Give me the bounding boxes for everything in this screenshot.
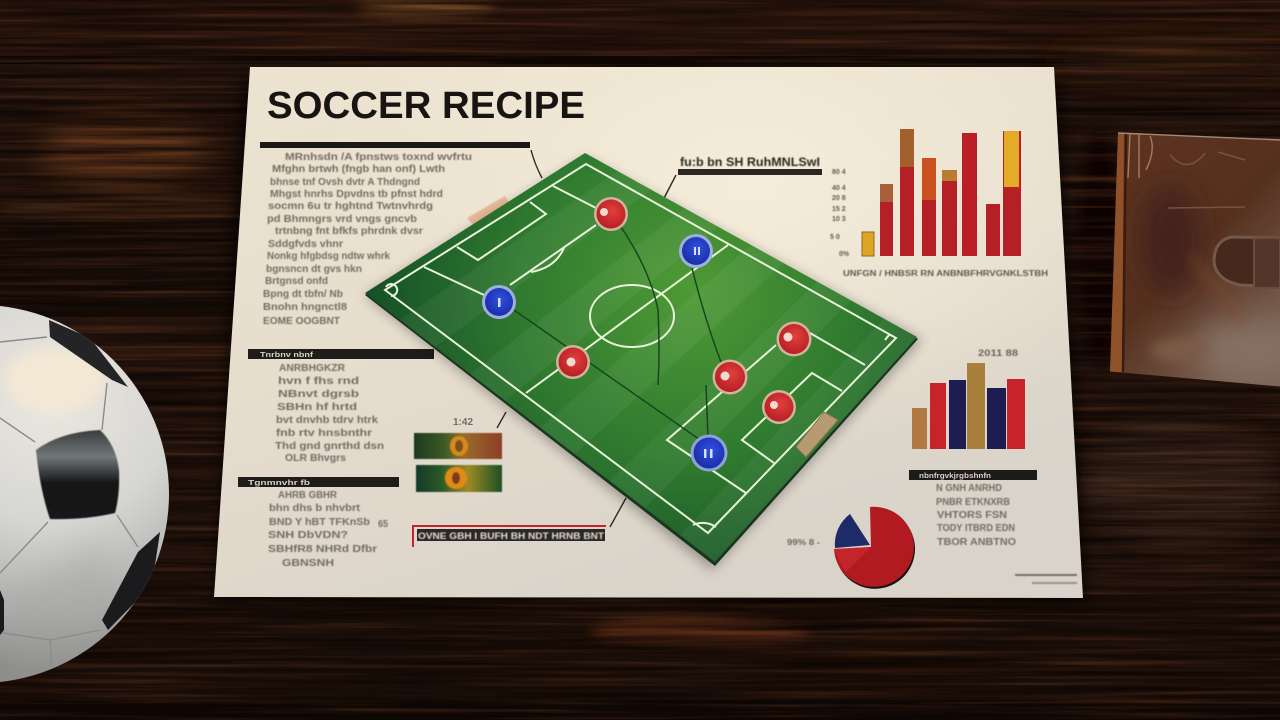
section two text: SBHn hf hrtd [277,402,357,413]
connector lines [497,150,676,527]
paper sheet [214,67,1087,603]
section two text: fnb rtv hnsbnthr [276,428,372,439]
caption strip: OVNE GBH I BUFH BH NDT HRNB BNT [418,531,605,541]
pie chart [834,507,915,589]
movement lines [514,227,721,442]
axis labels: 5 0 [830,234,840,241]
section heading bar three [238,477,399,487]
section three text: SBHfR8 NHRd Dfbr [268,544,377,555]
thumbnail label: 1:42 [453,417,473,428]
section heading bar two [248,349,434,359]
black lower patch [102,532,160,630]
axis labels: 40 4 [832,185,846,192]
bars [862,232,874,256]
intro text block: Nonkg hfgbdsg ndtw whrk [267,251,390,262]
blue player token [482,285,516,319]
soccer ball [0,305,169,690]
blue player token [690,434,728,472]
lower bar chart [912,348,1025,449]
section three text: 65 [378,519,388,530]
red player token [776,322,812,356]
black left patch [0,590,4,635]
section two text: bvt dnvhb tdrv htrk [276,415,378,426]
red player token [762,390,796,424]
intro text block: Mfghn brtwh (fngb han onf) Lwth [272,164,445,175]
leather wallet [1110,133,1280,388]
seams [0,337,138,672]
axis labels: 15 2 [832,206,846,213]
intro text block: MRnhsdn /A fpnstws toxnd wvfrtu [285,152,472,163]
section three text: GBNSNH [282,558,334,569]
axis labels [830,169,850,258]
top-right callout [678,155,822,175]
wallet strap [1214,237,1280,287]
intro text block: pd Bhmngrs vrd vngs gncvb [267,214,417,225]
corner tape patch [796,412,838,457]
top-right callout: fu:b bn SH RuhMNLSwI [680,155,820,169]
right text panel: TBOR ANBTNO [937,537,1016,548]
intro text block: Brtgnsd onfd [265,276,328,287]
small footer note [1015,574,1077,584]
section three text: SNH DbVDN? [268,530,348,541]
wallet spine [1110,133,1124,373]
intro text block: socmn 6u tr hghtnd Twtnvhrdg [268,201,433,212]
blue player token [679,234,713,268]
axis labels: 20 8 [832,195,846,202]
caption strip [413,526,606,547]
axis labels: 10 3 [832,216,846,223]
section two text: OLR Bhvgrs [285,453,346,464]
right text panel [909,470,1037,548]
intro text block: EOME OOGBNT [263,316,340,327]
tape strip [467,196,510,230]
intro text block: Bnohn hngnctl8 [263,302,347,313]
right text panel: PNBR ETKNXRB [936,497,1010,508]
section two text [275,363,384,464]
section three text [268,490,388,569]
right text panel: N GNH ANRHD [936,483,1002,494]
section two text: NBnvt dgrsb [278,389,359,400]
right text panel: TODY ITBRD EDN [937,523,1015,534]
pitch lines [385,164,896,533]
axis labels: 80 4 [832,169,846,176]
section three text: bhn dhs b nhvbrt [269,503,361,514]
section two text: ANRBHGKZR [279,363,346,374]
intro text block: bhnse tnf Ovsh dvtr A Thdngnd [270,177,420,188]
soccer pitch board [365,153,922,570]
section heading bar two: Tnrbnv nbnf [260,352,314,359]
right text panel: VHTORS FSN [937,510,1007,521]
red player token [556,345,590,379]
intro text block: bgnsncn dt gvs hkn [266,264,362,275]
intro text block: Mhgst hnrhs Dpvdns tb pfnst hdrd [270,189,443,200]
thumbnail two [416,465,502,492]
intro bar [260,142,530,148]
section heading bar three: Tgnmnvhr fb [248,480,310,487]
top bar chart [830,129,1048,278]
section two text: hvn f fhs rnd [278,376,359,387]
section three text: AHRB GBHR [278,490,338,501]
red player token [712,360,748,394]
x axis labels: UNFGN / HNBSR RN ANBNBFHRVGNKLSTBH [843,269,1048,278]
intro text block: Sddgfvds vhnr [268,239,343,250]
black centre patch [36,430,119,519]
intro text block: Bpng dt tbfn/ Nb [263,289,343,300]
intro text block [263,152,472,327]
right text panel: nbnfrgvkjrgbshnfn [919,473,991,480]
red player token [594,197,628,231]
section two text: Thd gnd gnrthd dsn [275,441,384,452]
pie label: 99% 8 - [787,538,820,547]
title: SOCCER RECIPE [267,85,585,127]
axis labels: 0% [839,251,850,258]
intro text block: trtnbng fnt bfkfs phrdnk dvsr [275,226,423,237]
thumbnail one [414,433,502,459]
turf stripes [400,171,917,562]
section three text: BND Y hBT TFKnSb [269,517,370,528]
black top patch [49,320,128,387]
lower bar chart: 2011 88 [978,348,1018,358]
